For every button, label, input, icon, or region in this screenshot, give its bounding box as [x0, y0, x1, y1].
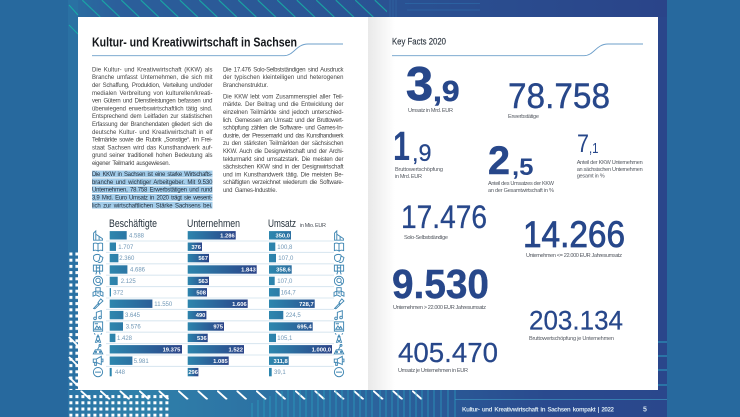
key fact: 7,1: ,1	[589, 141, 598, 157]
key fact: 2,5: 2	[488, 139, 510, 183]
text block: left column: Erfassung der Branchendaten gliedert sich die	[92, 122, 213, 128]
key fact: 1,9: ,9	[412, 140, 432, 167]
values: Umsatz: 100,8	[277, 245, 293, 251]
values: Unternehmen: 536	[197, 336, 207, 342]
values: Unternehmen: 1.843	[241, 268, 256, 274]
values: Umsatz: 311,8	[274, 359, 288, 365]
values: Beschäftigte: 4.686	[130, 268, 146, 274]
values: Umsatz: 107,0	[278, 256, 294, 262]
key fact: 7,1: Anteil der KKW Unternehmen	[577, 160, 643, 166]
heading: Key Facts: Key Facts 2020	[392, 36, 446, 48]
key fact: 3,9: ,9	[433, 76, 460, 108]
text block: right column: märkte. Der Beitrag und die Entwicklung der	[223, 102, 344, 108]
callout: highlighted text	[92, 171, 213, 209]
key fact: 1,9: 1	[393, 123, 410, 169]
icons left	[93, 231, 103, 377]
key fact: 78.758: 78.758	[508, 76, 610, 116]
text block: left column: Entsprechend dem Leitfaden zur statistischen	[92, 114, 212, 120]
text block: right column: sächsischen KKW sind in der Designwirtschaft	[223, 165, 344, 171]
key fact: 9.530: Unternehmen > 22.000 EUR Jahresumsatz	[393, 305, 486, 311]
key fact: 7,1: gesamt in %	[577, 174, 605, 180]
bars: Beschäftigte	[110, 231, 182, 376]
column headers: Umsatz	[268, 218, 296, 230]
text block: left column: Branche umfasst Unternehmen, die sich mit	[92, 75, 213, 81]
values: Unternehmen: 508	[196, 290, 207, 296]
right edge strip	[658, 17, 667, 390]
key fact: 17.476: Solo-Selbstständige	[404, 235, 448, 241]
values: Beschäftigte: 11.550	[154, 302, 173, 308]
values: Beschäftigte: 3.576	[126, 325, 141, 331]
text block: left column: grund seiner traditionell hohen Bedeutung als	[92, 153, 212, 159]
key fact: 2,5	[488, 139, 555, 194]
text block: left column: der Schaffung, Produktion, Verteilung und/oder	[92, 83, 212, 89]
values: Beschäftigte: 372	[113, 290, 124, 296]
values: Umsatz: 107,0	[277, 279, 293, 285]
values: Unternehmen: 296	[188, 370, 199, 376]
text block: right column: schöpfung zählen die Software- und Games-In-	[223, 126, 344, 132]
values: Unternehmen	[188, 233, 256, 376]
key fact: 14.266: 14.266	[523, 214, 625, 255]
values: Beschäftigte: 2.125	[121, 279, 136, 285]
text block: left column: medialen Verbreitung von kulturellen/kreati-	[92, 91, 212, 97]
text block: right column: dustrie, der Pressemarkt und das Kunsthandwerk	[223, 133, 344, 139]
text block: left column: Teilmärkte sowie die Rubrik „Sonstige“. Im Frei-	[92, 138, 212, 144]
bars: Unternehmen	[188, 231, 257, 376]
page number: 5	[643, 406, 647, 414]
values: Beschäftigte: 4.588	[129, 233, 145, 239]
key fact: 1,9: Bruttowertschöpfung	[395, 167, 443, 173]
title rule right	[392, 44, 643, 56]
text block: left column: Die Kultur- und Kreativwirtschaft (KKW) als	[92, 67, 212, 73]
footer text: Kultur- und Kreativwirtschaft in Sachsen kompakt | 2022	[462, 406, 615, 414]
key fact: 2,5: an der Gesamtwirtschaft in %	[488, 188, 554, 194]
text block: left column: staat Sachsen wird das Kunsthandwerk auf-	[92, 145, 212, 151]
key fact: 203.134: 203.134	[529, 305, 623, 335]
key fact: 78.758: Erwerbstätige	[508, 114, 539, 120]
key fact: 1,9: in Mrd. EUR	[395, 174, 422, 180]
values: Beschäftigte: 1.428	[117, 336, 133, 342]
text block: right column: einzelnen Teilmärkte sind jedoch unterschied-	[223, 110, 344, 116]
key fact: 203.134: Bruttowertschöpfung je Unternehmen	[529, 336, 614, 342]
column headers: Beschäftigte	[109, 218, 157, 230]
values: Beschäftigte: 448	[115, 370, 126, 376]
callout: highlighted text: 3,9 Mrd. Euro Umsatz in 2020 trägt sie wesent-	[92, 196, 212, 202]
values: Unternehmen: 1.286	[220, 233, 235, 239]
values: Umsatz	[274, 233, 331, 376]
values: Unternehmen: 1.085	[213, 359, 228, 365]
values: Umsatz: 728,7	[299, 302, 314, 308]
text block: right column: schäftigten verzeichnet wiederum die Software-	[223, 180, 344, 186]
key fact: 9.530: 9.530	[392, 261, 489, 307]
chart: table of sub-markets	[93, 218, 344, 377]
values: Beschäftigte: 2.360	[119, 256, 135, 262]
left edge strip	[68, 0, 79, 417]
values: Umsatz: 224,5	[286, 313, 301, 319]
text block: left column: eigener Teilmarkt ausgewiesen.	[92, 161, 170, 167]
heading: left page title: Kultur- und Kreativwirtschaft in Sachsen	[92, 36, 297, 50]
key fact: 7,1: an sächsischen Unternehmen	[577, 167, 643, 173]
text block: right column: Die 17.476 Solo-Selbstständigen sind Ausdruck	[223, 67, 344, 73]
values: Umsatz: 695,4	[297, 325, 312, 331]
key fact: 7,1	[577, 130, 643, 180]
text block: left column	[92, 67, 213, 167]
bottom strip	[68, 390, 667, 417]
column headers: Unternehmen	[187, 218, 240, 230]
key fact: 7,1: 7	[577, 130, 589, 158]
text block: right column: tekturmarkt sind umsatzstark. Die meisten der	[223, 157, 344, 163]
values: Unternehmen: 975	[213, 325, 224, 331]
column headers: in Mio. EUR	[300, 223, 326, 229]
text block: right column: KKW. Auch die Designwirtschaft und der Archi-	[223, 149, 344, 155]
key fact: 2,5: Anteil des Umsatzes der KKW	[488, 181, 555, 187]
text block: left column: deutsche Kultur- und Kreativwirtschaft in elf	[92, 130, 213, 136]
values: Beschäftigte: 1.707	[118, 245, 134, 251]
callout: highlighted text: lich zur wirtschaftlichen Stärke Sachsens bei.	[92, 203, 213, 209]
values: Umsatz: 350,0	[275, 233, 290, 239]
title rule left	[92, 44, 343, 56]
key fact: 17.476: 17.476	[401, 199, 487, 235]
text block: left column: ven Gütern und Dienstleistungen befassen und	[92, 99, 212, 105]
callout: highlighted text: Unternehmen, 78.758 Erwerbstätigen und rund	[92, 188, 212, 194]
text block: right column: Die KKW lebt vom Zusammenspiel aller Teil-	[223, 94, 344, 100]
values: Unternehmen: 376	[191, 245, 202, 251]
icons right	[334, 231, 344, 377]
top strip with teal hatch	[68, 0, 667, 17]
values: Beschäftigte: 5.981	[134, 359, 149, 365]
values: Unternehmen: 567	[198, 256, 208, 262]
values: Beschäftigte: 19.375	[163, 347, 181, 353]
text block: right column: zu den stärksten Teilmärkten der sächsischen	[223, 141, 344, 147]
values: Beschäftigte	[113, 233, 181, 376]
key fact: 405.470: 405.470	[398, 337, 498, 368]
text block: right column: und Games-Industrie.	[223, 188, 277, 194]
text block: right column	[223, 67, 344, 194]
values: Unternehmen: 1.522	[228, 347, 243, 353]
key fact: 1,9	[393, 123, 443, 180]
values: Umsatz: 358,6	[276, 268, 291, 274]
callout: highlighted text: branche und wichtiger Arbeitgeber. Mit 9.530	[92, 180, 213, 186]
values: Umsatz: 1.000,0	[312, 347, 331, 353]
callout: highlighted text: Die KKW in Sachsen ist eine starke Wirtschafts-	[92, 172, 212, 178]
key fact: 3,9: 3	[406, 57, 433, 110]
values: Umsatz: 164,7	[281, 290, 296, 296]
values: Unternehmen: 490	[196, 313, 205, 319]
text block: right column: und im Kunsthandwerk tätig. Die meisten Be-	[223, 172, 344, 178]
values: Unternehmen: 1.606	[232, 302, 247, 308]
text block: right column: Branchenstruktur.	[223, 83, 268, 89]
panel: white spread	[78, 17, 658, 390]
key fact: 405.470: Umsatz je Unternehmen in EUR	[398, 368, 468, 374]
bars: Umsatz	[269, 231, 332, 376]
values: Beschäftigte: 3.645	[125, 313, 141, 319]
key fact: 3,9: Umsatz in Mrd. EUR	[408, 108, 453, 114]
key fact: 2,5: ,5	[512, 154, 534, 181]
key fact: 14.266: Unternehmen <= 22.000 EUR Jahresumsatz	[526, 253, 622, 259]
text block: right column: der typischen kleinteiligen und heterogenen	[223, 75, 344, 81]
values: Umsatz: 39,1	[274, 370, 286, 376]
values: Umsatz: 105,1	[277, 336, 293, 342]
values: Unternehmen: 563	[198, 279, 209, 285]
column headers	[109, 218, 326, 230]
key fact: 3,9	[406, 57, 460, 114]
text block: left column: überwiegend erwerbswirtschaftlich tätig sind.	[92, 106, 213, 112]
text block: right column: lich. Gemessen am Umsatz und der Bruttowert-	[223, 118, 344, 124]
